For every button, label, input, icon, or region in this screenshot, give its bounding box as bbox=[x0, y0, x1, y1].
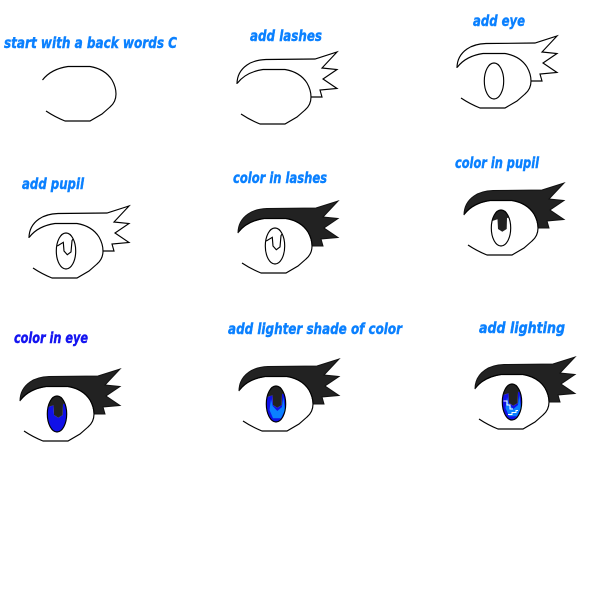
heading: add lighting: add lighting bbox=[479, 319, 565, 337]
step 1 eye: backwards C bbox=[42, 66, 116, 121]
step 6 eye: filled pupil bbox=[464, 183, 564, 255]
step 3 eye: iris outline bbox=[457, 36, 557, 108]
step 9 eye: white highlights bbox=[475, 357, 575, 429]
heading: color in lashes: color in lashes bbox=[233, 169, 327, 187]
step 5 eye: filled lashes bbox=[238, 201, 338, 273]
step 8 eye: lighter blue crescent bbox=[239, 359, 339, 431]
heading: add lighter shade of color: add lighter shade of color bbox=[228, 320, 403, 338]
heading: start with a back words C: start with a back words C bbox=[4, 34, 177, 52]
step 4 eye: pupil outline bbox=[29, 206, 129, 278]
heading: add lashes: add lashes bbox=[250, 27, 322, 45]
heading: add eye: add eye bbox=[473, 12, 525, 30]
heading: color in pupil: color in pupil bbox=[455, 154, 540, 172]
heading: add pupil: add pupil bbox=[22, 175, 85, 193]
step 2 eye: lashes outline bbox=[237, 52, 337, 124]
step 7 eye: blue iris bbox=[20, 369, 120, 441]
heading: color in eye: color in eye bbox=[14, 329, 88, 347]
